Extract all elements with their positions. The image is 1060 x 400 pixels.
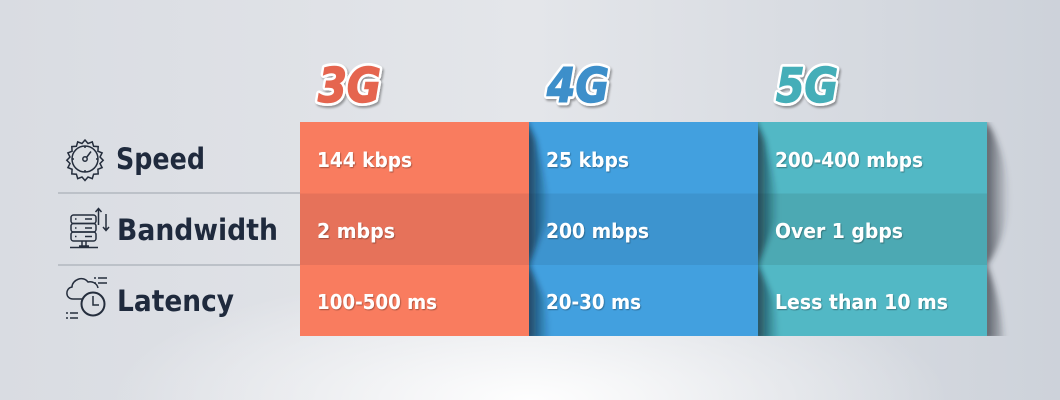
row label: Bandwidth [70, 208, 278, 248]
row dividers [58, 192, 300, 266]
values: 3G: 100-500 ms [317, 290, 437, 314]
values: 5G [775, 148, 948, 314]
values: 5G: Over 1 gbps [775, 219, 903, 243]
heading: 5G: 5G [776, 59, 838, 114]
row label: Latency [66, 278, 234, 318]
values: 4G: 20-30 ms [546, 290, 641, 314]
heading: 4G: 4G [546, 59, 609, 114]
values: 5G: Less than 10 ms [775, 290, 948, 314]
row label: Speed [67, 140, 205, 180]
label: Bandwidth [117, 213, 278, 247]
column: 5G [754, 118, 987, 340]
label: Speed [116, 142, 205, 176]
column: 3G [300, 122, 529, 336]
values: 3G: 2 mbps [317, 219, 395, 243]
fold shadow: right edge [987, 122, 1009, 336]
values: 4G: 25 kbps [546, 148, 629, 172]
values: 4G: 200 mbps [546, 219, 649, 243]
values: 4G [546, 148, 649, 314]
values: 3G [317, 148, 437, 314]
heading: 5G: 5G [776, 59, 838, 114]
heading: 3G: 3G [318, 59, 381, 114]
column: 4G [525, 118, 758, 340]
values: 5G: 200-400 mbps [775, 148, 923, 172]
heading: 4G: 4G [546, 59, 609, 114]
icon: cloud with clock [66, 278, 107, 318]
label: Latency [117, 284, 234, 318]
icon: speed gauge in gear [67, 140, 103, 180]
icon: server with arrows [70, 208, 109, 248]
values: 3G: 144 kbps [317, 148, 412, 172]
heading: 3G: 3G [318, 59, 381, 114]
